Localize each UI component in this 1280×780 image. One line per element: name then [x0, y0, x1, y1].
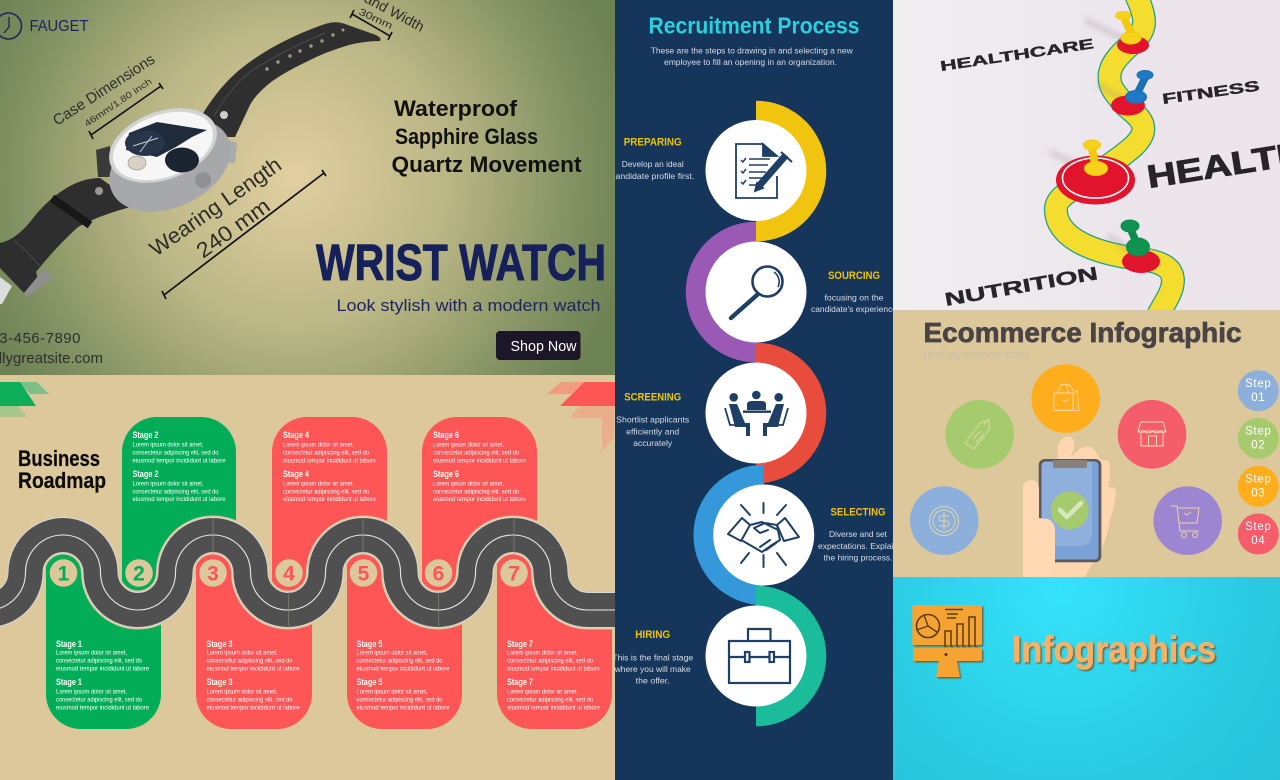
pin: blue: [1126, 70, 1153, 104]
stage 4 text: Stage 4: [283, 430, 309, 440]
label: hiring: [612, 629, 693, 686]
pin: yellow small: [1116, 12, 1141, 44]
feature list: Waterproof: [394, 96, 518, 121]
labels: FITNESS: [1161, 78, 1261, 108]
stage 4 card: [272, 417, 387, 595]
label: hiring: This is the final stage: [612, 653, 693, 663]
corner arrows: green: [0, 382, 49, 417]
label: preparing: Develop an ideal: [622, 159, 684, 169]
panel: business roadmap: [0, 375, 620, 780]
stage 1 text: consectetur adipiscing elit, sed do: [56, 658, 142, 664]
stage 7 text: Lorem ipsum dolor sit amet,: [507, 688, 578, 696]
stage 1 text: Lorem ipsum dolor sit amet,: [56, 650, 127, 656]
stage 1 text: [56, 639, 149, 712]
panel: ecommerce infographic: [893, 310, 1280, 577]
labels: HEALTH: [1144, 134, 1280, 195]
label: preparing: PREPARING: [624, 137, 682, 149]
label: screening: SCREENING: [624, 392, 681, 404]
stage 7 text: [507, 639, 600, 712]
ring: screening: [756, 343, 826, 483]
ring: preparing: [756, 101, 826, 241]
stage 3 text: eiusmod tempor incididunt ut labore: [206, 666, 300, 672]
stage 1 text: consectetur adipiscing elit, sed do: [56, 696, 142, 704]
heading: Business: [18, 446, 100, 471]
headline: WRIST WATCH: [316, 234, 606, 291]
callout: case dimensions: Case Dimensions: [50, 51, 158, 129]
stage 2 text: Stage 2: [132, 469, 159, 479]
stage 7 text: Lorem ipsum dolor sit amet,: [507, 650, 578, 656]
intro: These are the steps to drawing in and selecting a new: [651, 46, 853, 56]
labels: HEALTHCARE: [939, 35, 1095, 74]
button: shop now: Shop Now: [510, 339, 577, 355]
stage 2 text: eiusmod tempor incididunt ut labore: [132, 496, 226, 503]
callout: wearing length: 240 mm: [192, 194, 275, 263]
road milestones 1 to 7: [50, 559, 528, 587]
stage 5 text: [356, 639, 450, 712]
panel: recruitment process: [615, 16, 893, 726]
map markers: [1056, 36, 1160, 273]
labels: [939, 35, 1280, 310]
ring: hiring: [756, 586, 826, 726]
step badge 01: 01: [1251, 392, 1265, 404]
stage 6 text: consectetur adipiscing elit, sed do: [433, 450, 519, 456]
heading: [18, 446, 106, 493]
step badge 03: Step: [1245, 474, 1272, 486]
road milestones 1 to 7: 3: [207, 562, 219, 586]
winding road: [0, 518, 620, 628]
stage 6 text: Stage 6: [433, 469, 459, 479]
hand behind phone: [1055, 437, 1116, 577]
stage 6 text: [433, 430, 526, 503]
stage 6 text: Lorem ipsum dolor sit amet,: [433, 442, 504, 448]
road milestones 1 to 7: 6: [433, 562, 444, 586]
stage 2 text: eiusmod tempor incididunt ut labore: [132, 458, 226, 464]
label: selecting: SELECTING: [830, 507, 886, 519]
label: preparing: candidate profile first.: [611, 171, 694, 181]
panel: 3D infographics banner: [893, 577, 1280, 780]
pin shadows: [1050, 20, 1135, 255]
icon: handshake: [728, 503, 799, 567]
road milestones 1 to 7: 7: [508, 562, 520, 586]
stage 2 text: consectetur adipiscing elit, sed do: [132, 450, 219, 456]
stage 2 text: Stage 2: [132, 430, 159, 440]
stage 5 text: eiusmod tempor incididunt ut labore: [356, 666, 450, 672]
stage 2 text: [132, 430, 226, 503]
stage 7 text: Stage 7: [507, 639, 533, 649]
stage 3 text: Lorem ipsum dolor sit amet,: [206, 650, 278, 656]
stage 3 card: [196, 553, 312, 729]
stage 4 text: eiusmod tempor incididunt ut labore: [283, 496, 376, 503]
stage 1 text: Stage 1: [56, 677, 82, 687]
stage 5 text: consectetur adipiscing elit, sed do: [356, 696, 443, 704]
stage 6 card: [422, 417, 537, 595]
intro: [650, 48, 853, 66]
callout: wearing length: [145, 153, 326, 299]
heading: Infographics: [1012, 629, 1216, 670]
stage 3 text: Stage 3: [206, 639, 233, 649]
stage 4 text: Lorem ipsum dolor sit amet,: [283, 442, 354, 448]
logo: Fauget: FAUGET: [30, 18, 89, 35]
stage 3 text: consectetur adipiscing elit, sed do: [206, 658, 293, 664]
stage 3 text: eiusmod tempor incididunt ut labore: [206, 704, 300, 712]
stage 5 text: Stage 5: [356, 639, 383, 649]
stage 1 text: eiusmod tempor incididunt ut labore: [56, 704, 149, 712]
feature list: [392, 96, 582, 177]
icon: magnifier: [731, 266, 782, 318]
ring: selecting: [693, 465, 764, 605]
phone: [1039, 459, 1101, 562]
tagline: Look stylish with a modern watch: [336, 296, 600, 315]
label: preparing: [611, 137, 694, 181]
title: Recruitment Process: [648, 12, 860, 38]
stage 4 text: Lorem ipsum dolor sit amet,: [283, 480, 354, 488]
stage 4 text: [283, 430, 376, 503]
step badge 01: Step: [1245, 378, 1272, 390]
label: screening: efficiently and: [626, 426, 679, 436]
stage 4 text: eiusmod tempor incididunt ut labore: [283, 458, 376, 464]
stage 6 text: eiusmod tempor incididunt ut labore: [433, 496, 526, 503]
intro: employee to fill an opening in an organization.: [664, 57, 837, 67]
stage 6 text: eiusmod tempor incididunt ut labore: [433, 458, 526, 464]
stage 5 text: eiusmod tempor incididunt ut labore: [356, 704, 450, 712]
icon: checklist and pen: [736, 144, 792, 198]
callout: band width: 30mm: [357, 7, 394, 32]
heading: Roadmap: [18, 468, 106, 493]
stage 1 card: [46, 553, 161, 729]
step badge 01: [1238, 370, 1279, 411]
stage 7 text: eiusmod tempor incididunt ut labore: [507, 704, 600, 712]
stage 6 text: Stage 6: [433, 430, 459, 440]
watch photo: [0, 22, 380, 304]
stage 7 text: Stage 7: [507, 677, 533, 687]
road milestones 1 to 7: 5: [358, 562, 370, 586]
stage 5 text: Lorem ipsum dolor sit amet,: [356, 688, 428, 696]
stage 7 text: consectetur adipiscing elit, sed do: [507, 696, 593, 704]
pin: green: [1121, 220, 1150, 256]
label: sourcing: candidate's experience: [811, 304, 897, 314]
white discs: [706, 120, 814, 706]
icon: price tag: [945, 400, 1014, 469]
panel: wrist watch advert: [0, 0, 615, 376]
stage 7 text: consectetur adipiscing elit, sed do: [507, 658, 593, 664]
label: selecting: expectations. Explain: [818, 541, 898, 551]
ring: sourcing: [686, 222, 756, 362]
labels: NUTRITION: [943, 262, 1099, 310]
stage 7 text: eiusmod tempor incididunt ut labore: [507, 666, 600, 672]
stage 3 text: consectetur adipiscing elit, sed do: [206, 696, 293, 704]
feature list: Quartz Movement: [392, 152, 582, 177]
road milestones 1 to 7: 2: [133, 562, 145, 586]
label: sourcing: SOURCING: [828, 270, 880, 282]
icon: monitor with charts: [912, 605, 982, 677]
label: screening: accurately: [633, 438, 673, 448]
icon: shopping bag: [1031, 364, 1100, 433]
panel: health photo: [893, 0, 1280, 315]
icon: dollar coin: [910, 486, 979, 555]
step badge 04: [1238, 514, 1279, 554]
stage 5 card: [347, 553, 462, 729]
step badge 03: [1238, 466, 1279, 507]
stage 3 text: [206, 639, 300, 712]
stage 3 text: Lorem ipsum dolor sit amet,: [206, 688, 278, 696]
icon: storefront: [1118, 400, 1186, 469]
stage 1 text: Stage 1: [56, 639, 82, 649]
pin: yellow large: [1084, 140, 1108, 176]
website: reallygreatsite.com: [923, 349, 1029, 361]
stage 2 text: Lorem ipsum dolor sit amet,: [132, 442, 204, 448]
stage 6 text: consectetur adipiscing elit, sed do: [433, 488, 519, 496]
stage 6 text: Lorem ipsum dolor sit amet,: [433, 480, 504, 488]
stage 5 text: Stage 5: [356, 677, 383, 687]
step badge 02: Step: [1245, 426, 1272, 438]
label: sourcing: focusing on the: [824, 293, 884, 303]
stage 2 card: [122, 417, 236, 595]
step badge 02: [1238, 418, 1279, 459]
callout: case dimensions: 46mm/1.80 inch: [83, 76, 154, 129]
label: hiring: where you will make: [614, 664, 691, 674]
stage 2 text: consectetur adipiscing elit, sed do: [132, 488, 219, 496]
label: selecting: [818, 507, 898, 563]
stage 4 text: consectetur adipiscing elit, sed do: [283, 488, 369, 496]
contact details: [0, 333, 102, 366]
logo: Fauget: [0, 13, 89, 39]
road milestones 1 to 7: 4: [283, 562, 295, 586]
label: screening: Shortlist applicants: [616, 415, 689, 425]
feature list: Sapphire Glass: [395, 124, 538, 149]
callout: wearing length: Wearing Length: [145, 153, 286, 261]
stage 4 text: consectetur adipiscing elit, sed do: [283, 450, 369, 456]
label: hiring: the offer.: [636, 676, 670, 686]
label: hiring: HIRING: [635, 629, 670, 641]
step badge 04: Step: [1245, 521, 1272, 533]
title: Ecommerce Infographic: [924, 317, 1242, 348]
label: sourcing: [811, 270, 897, 314]
stage 5 text: consectetur adipiscing elit, sed do: [356, 658, 443, 664]
label: screening: [616, 392, 689, 448]
icon: shopping cart: [1153, 486, 1222, 555]
stage 5 text: Lorem ipsum dolor sit amet,: [356, 650, 428, 656]
step badge 04: 04: [1251, 535, 1265, 547]
stage 3 text: Stage 3: [206, 677, 233, 687]
icon: meeting table: [725, 391, 788, 436]
step badge 03: 03: [1251, 488, 1265, 500]
marker ring: [1062, 158, 1128, 198]
button: shop now: [496, 331, 580, 360]
stage 4 text: Stage 4: [283, 469, 309, 479]
road milestones 1 to 7: 1: [58, 562, 70, 586]
step badge 02: 02: [1251, 440, 1265, 452]
label: selecting: the hiring process.: [824, 553, 892, 563]
stage 2 text: Lorem ipsum dolor sit amet,: [132, 480, 204, 488]
hand thumb: [1023, 480, 1055, 577]
label: selecting: Diverse and set: [829, 529, 888, 539]
winding yellow path: [1056, 0, 1173, 315]
stage 7 card: [497, 553, 612, 729]
icon: briefcase: [729, 629, 790, 683]
stage 1 text: Lorem ipsum dolor sit amet,: [56, 688, 127, 696]
corner arrows: red: [547, 382, 615, 451]
stage 1 text: eiusmod tempor incididunt ut labore: [56, 666, 149, 672]
